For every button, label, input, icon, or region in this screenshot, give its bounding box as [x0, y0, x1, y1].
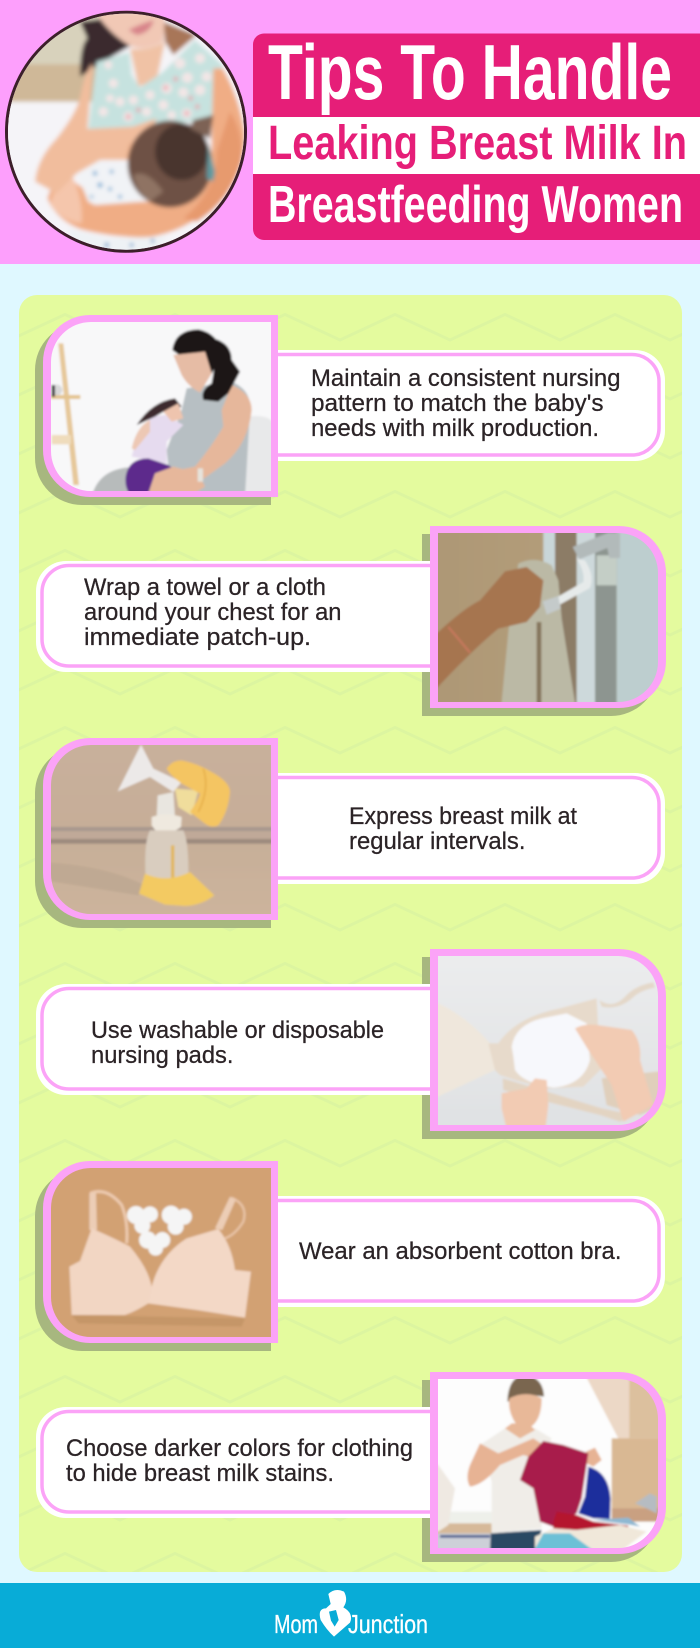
- tip 2 text: immediate patch-up.: [84, 624, 311, 651]
- frame: [430, 526, 666, 708]
- wordmark left: Mom: [274, 1609, 318, 1639]
- image shadow: [422, 1380, 658, 1562]
- tip 3 text: regular intervals.: [349, 828, 526, 855]
- tip 1 text: pattern to match the baby's: [311, 390, 604, 417]
- tip 4 text: [91, 1017, 384, 1069]
- header band: [0, 0, 700, 264]
- tip 3 text: [349, 803, 577, 855]
- tip 4 text: Use washable or disposable: [91, 1017, 384, 1044]
- photo: woman sorting clothes: [438, 1379, 658, 1548]
- tip 2 text: Wrap a towel or a cloth: [84, 574, 326, 601]
- tip 2 card: [36, 522, 673, 722]
- footer logo: MomJunction: [274, 1590, 428, 1639]
- image shadow: [35, 746, 271, 928]
- photo: nursing pad in bra: [438, 956, 658, 1125]
- tip 6 text: to hide breast milk stains.: [66, 1460, 334, 1487]
- photo: mother nursing toddler: [51, 322, 271, 491]
- frame: [43, 1161, 278, 1343]
- text box: [250, 350, 665, 461]
- tip 3 text: Express breast milk at: [349, 803, 577, 830]
- tip 1 text: needs with milk production.: [311, 415, 599, 442]
- frame: [43, 315, 278, 497]
- image shadow: [422, 957, 658, 1139]
- photo: hand holding towel: [438, 533, 658, 702]
- tip 3 card: [35, 732, 665, 932]
- wordmark right: Junction: [348, 1609, 428, 1639]
- text box: [250, 1196, 665, 1307]
- frame: [43, 738, 278, 920]
- tip 5 text: Wear an absorbent cotton bra.: [299, 1238, 622, 1265]
- tip 1 text: [311, 365, 620, 442]
- frame: [430, 949, 666, 1131]
- text box: [36, 561, 450, 672]
- icon: mother and child: [320, 1590, 351, 1637]
- frame: [430, 1372, 666, 1554]
- text box: [36, 1407, 450, 1518]
- image shadow: [35, 1169, 271, 1351]
- tip 4 text: nursing pads.: [91, 1042, 234, 1069]
- tip 2 text: around your chest for an: [84, 599, 342, 626]
- title banner: [253, 28, 700, 240]
- tip 1 card: [35, 310, 665, 510]
- tip 6 text: [66, 1435, 413, 1487]
- text box: [250, 773, 665, 884]
- tip 6 card: [36, 1365, 673, 1565]
- photo: cotton bra: [51, 1168, 271, 1337]
- tip 1 text: Maintain a consistent nursing: [311, 365, 620, 392]
- image shadow: [35, 323, 271, 505]
- photo: breast pump: [51, 745, 271, 914]
- green tips panel: [19, 295, 682, 1572]
- image shadow: [422, 534, 658, 716]
- header photo: mother nursing baby: [0, 5, 253, 258]
- tip 2 text: [84, 574, 342, 651]
- tip 4 card: [36, 945, 673, 1145]
- tip 6 text: Choose darker colors for clothing: [66, 1435, 413, 1462]
- tip 5 card: [35, 1155, 665, 1355]
- text box: [36, 984, 450, 1095]
- footer band: [0, 1583, 700, 1648]
